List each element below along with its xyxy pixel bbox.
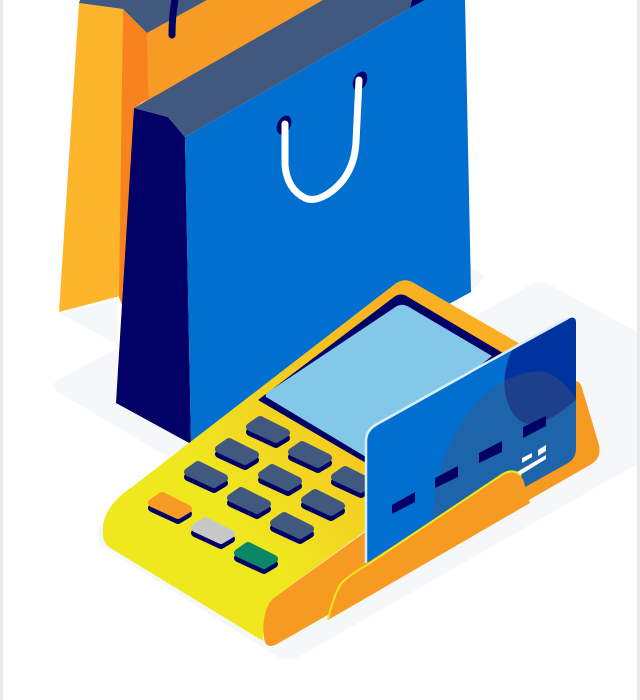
key 7 (188, 465, 224, 489)
key 5 (262, 468, 298, 492)
blue bag top flap (134, 0, 412, 137)
terminal yellow top (103, 280, 522, 641)
blue bag side face (116, 108, 191, 444)
card white border (366, 318, 568, 563)
keypad (152, 420, 371, 570)
orange bag side fold (119, 9, 149, 310)
green function key (238, 546, 274, 570)
orange bag top flap (79, 0, 207, 33)
card number dashes (392, 416, 546, 514)
blue bag inner corner (410, 0, 425, 8)
orange shopping bag (59, 0, 330, 312)
key 2 (292, 445, 328, 469)
screen bezel (258, 294, 503, 463)
blue bag white handle (285, 80, 359, 199)
key 3 (335, 470, 371, 494)
slot front (328, 471, 530, 620)
terminal orange base (263, 381, 600, 646)
orange bag handle (172, 0, 175, 35)
key 1 (250, 420, 286, 444)
card white details (517, 445, 546, 477)
orange bag front face (130, 0, 330, 114)
screen (266, 305, 492, 457)
slot yellow edge (328, 471, 521, 620)
floor shadows (54, 266, 637, 660)
blue bag handle holes (274, 69, 370, 137)
orange bag left face (59, 3, 123, 312)
card decorative shapes (433, 318, 576, 520)
key 9 (274, 516, 310, 540)
key 8 (231, 491, 267, 515)
key 4 (219, 442, 255, 466)
orange function key (152, 496, 188, 520)
blue shopping bag (116, 0, 471, 444)
key 6 (305, 493, 341, 517)
grey function key (195, 521, 231, 545)
card terminal (103, 280, 600, 646)
card base (367, 318, 576, 563)
card slot (328, 471, 530, 620)
credit card (366, 310, 577, 563)
blue bag front face (185, 0, 471, 444)
